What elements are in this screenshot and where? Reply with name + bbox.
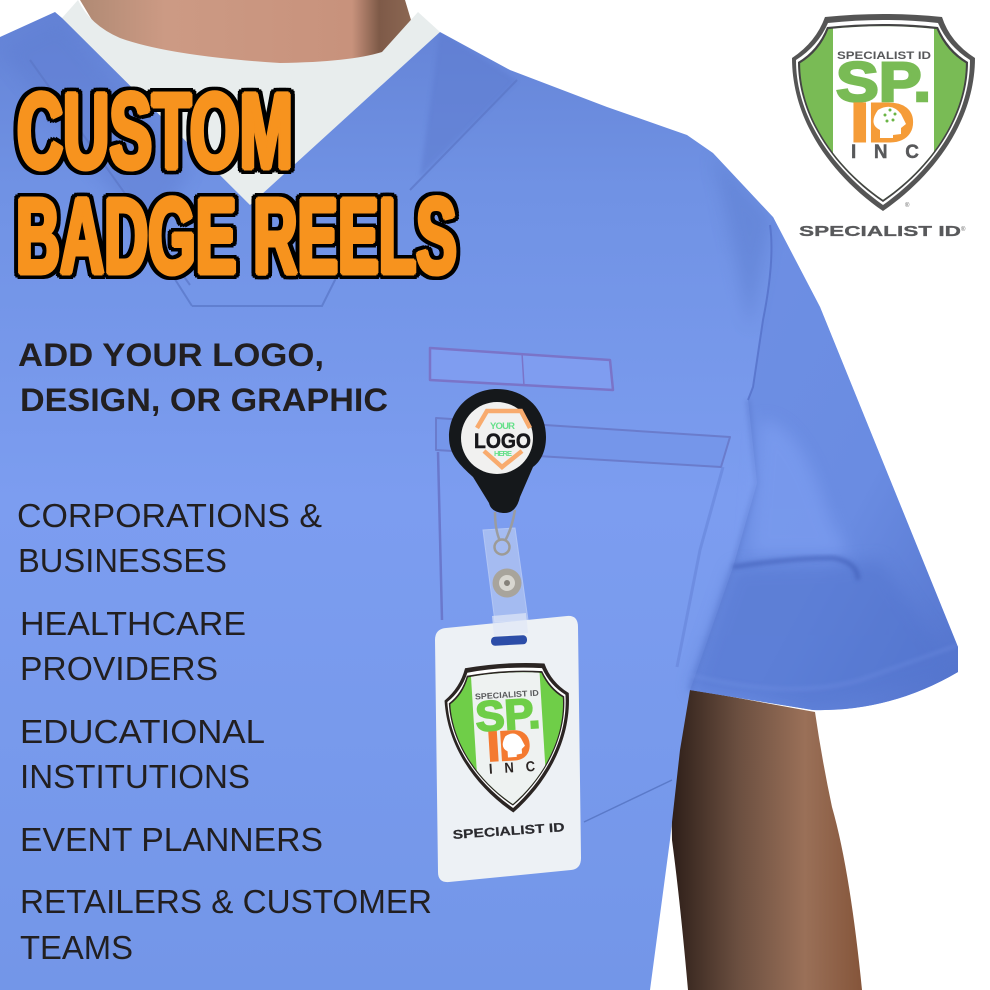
pocket [430, 348, 730, 667]
audience list: EVENT PLANNERS [20, 821, 323, 858]
audience list: TEAMS [20, 929, 133, 966]
photo: arm [672, 688, 862, 990]
clear strap [483, 528, 528, 622]
photo: neck [80, 0, 420, 75]
your logo sticker: LOGO [474, 430, 531, 453]
audience list: HEALTHCARE [20, 605, 246, 642]
your logo sticker: HERE [494, 449, 512, 458]
id badge: SPECIALIST ID [452, 820, 565, 842]
audience list: PROVIDERS [20, 650, 218, 687]
company logo: INC [851, 142, 919, 163]
photo: white t-shirt [62, 0, 440, 210]
title [13, 70, 460, 296]
badge reel [449, 389, 546, 622]
sleeve [690, 217, 958, 710]
shading and folds [422, 33, 509, 172]
icon: head [873, 107, 906, 138]
subheading: ADD YOUR LOGO, [18, 337, 324, 373]
company logo: SPECIALIST ID [799, 223, 961, 240]
hook [495, 510, 515, 541]
company logo: ® [905, 202, 910, 209]
audience list [17, 497, 432, 966]
audience list: CORPORATIONS & [17, 497, 322, 534]
badge shield: SPECIALIST ID [475, 688, 539, 702]
badge shield: SP. [474, 690, 541, 741]
subheading: DESIGN, OR GRAPHIC [20, 382, 388, 418]
badge shield [444, 663, 569, 812]
title: BADGE REELS [16, 175, 457, 296]
audience list: RETAILERS & CUSTOMER [20, 883, 432, 920]
company logo: SP. [836, 50, 931, 113]
audience list: EDUCATIONAL [20, 713, 265, 750]
logo shield [792, 14, 975, 211]
id badge [434, 613, 586, 882]
your logo sticker: YOUR [490, 421, 515, 432]
reel body [449, 389, 546, 513]
audience list: BUSINESSES [18, 542, 227, 579]
badge shield: INC [488, 758, 536, 777]
company logo: ID [851, 93, 914, 153]
company logo [792, 14, 975, 236]
your logo sticker [474, 411, 531, 467]
logo lettering: SPECIALIST ID [837, 50, 931, 62]
badge shield: ID [486, 723, 532, 770]
audience list: INSTITUTIONS [20, 758, 250, 795]
snap [492, 568, 522, 598]
title: CUSTOM [17, 70, 293, 191]
subheading [18, 337, 388, 418]
company logo: ® [961, 226, 966, 233]
